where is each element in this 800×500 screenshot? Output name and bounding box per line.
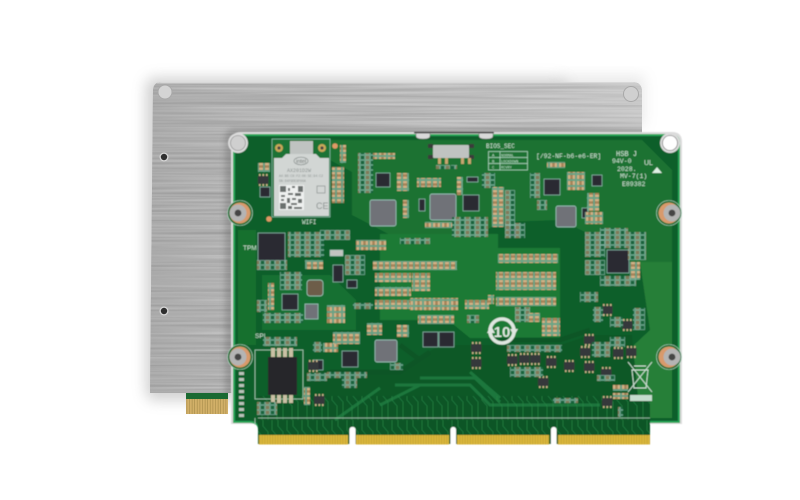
BIOS select table: B <box>492 160 495 164</box>
plate screw: upper <box>160 152 168 162</box>
heat spreader plate <box>150 82 642 393</box>
antenna connector: left <box>274 143 285 154</box>
wifi module markings: A4:B6:C0:F2:00:5E:94:C2 <box>279 174 323 178</box>
compliance logo: 10 year recycling <box>487 319 518 343</box>
screw: lower left <box>228 344 252 370</box>
BIOS select table: A <box>492 154 495 158</box>
label: SPI: SPI <box>255 333 266 340</box>
gold edge fingers <box>259 427 650 446</box>
label: part code: [/92-NF-b6-e6-ER] <box>536 153 601 160</box>
board certification marks: 94V-0 <box>612 158 632 165</box>
icon: crossed-out bin <box>628 362 652 392</box>
screw: upper right <box>656 200 682 226</box>
BIOS select table: NORMAL <box>501 154 514 158</box>
board silver frame <box>231 132 682 444</box>
wifi module markings: SN:D4F9DE8F00A <box>279 179 306 183</box>
label: TPM: TPM <box>243 245 257 252</box>
hole: top left <box>228 133 248 153</box>
BIOS select table: LOCKDOWN <box>501 160 518 164</box>
integrated circuit: TPM <box>258 233 285 262</box>
plate mounting hole: top left <box>158 85 172 99</box>
wifi module markings: intel <box>296 159 306 165</box>
circuit board <box>228 132 682 446</box>
board certification marks: 2028. <box>617 166 637 173</box>
hole: top right <box>660 133 680 153</box>
copper pours <box>238 140 672 418</box>
screw: lower right <box>656 344 682 370</box>
wifi module markings: CE <box>316 201 329 211</box>
board certification marks: HSB J <box>616 151 637 159</box>
board certification marks: E89382 <box>622 181 646 188</box>
board green base <box>233 134 680 444</box>
wifi module markings: AX201D2W <box>287 168 311 174</box>
wifi module markings <box>279 157 329 211</box>
screw: upper left <box>228 200 252 226</box>
board soft shadow on plate <box>223 126 642 393</box>
top edge connector tabs <box>414 132 494 139</box>
plate screw: lower <box>160 306 168 316</box>
label: BIOS_SEC: BIOS_SEC <box>486 143 515 150</box>
left edge pads <box>239 360 244 417</box>
small transistors <box>258 174 636 408</box>
board certification marks: UL <box>644 160 653 167</box>
switch: BIOS select <box>428 144 474 169</box>
board certification marks <box>612 151 662 188</box>
connector notches <box>350 427 556 446</box>
integrated circuit: SPI flash <box>255 348 303 403</box>
plate mounting hole: top right <box>624 86 638 102</box>
plate edge connector <box>186 393 228 414</box>
wifi module QR code <box>279 185 304 210</box>
board certification marks: MV-7(1) <box>620 173 647 180</box>
corner mounting holes <box>228 133 680 153</box>
BIOS select table: RCVRY <box>501 166 513 170</box>
BIOS select table <box>488 152 528 170</box>
drop shadow behind plate <box>146 76 644 400</box>
wifi module <box>272 139 330 217</box>
routed signal traces <box>255 330 650 436</box>
label: WIFI: WIFI <box>302 219 316 226</box>
white label strip <box>630 395 652 401</box>
orange test pads <box>266 143 338 222</box>
compliance logo: 10 year recycling: 10 <box>494 324 510 341</box>
antenna connector: right <box>317 143 328 154</box>
BIOS select table: C <box>492 166 495 170</box>
passive component clusters <box>257 145 646 417</box>
power inductors <box>305 194 576 362</box>
integrated circuits <box>260 173 629 370</box>
